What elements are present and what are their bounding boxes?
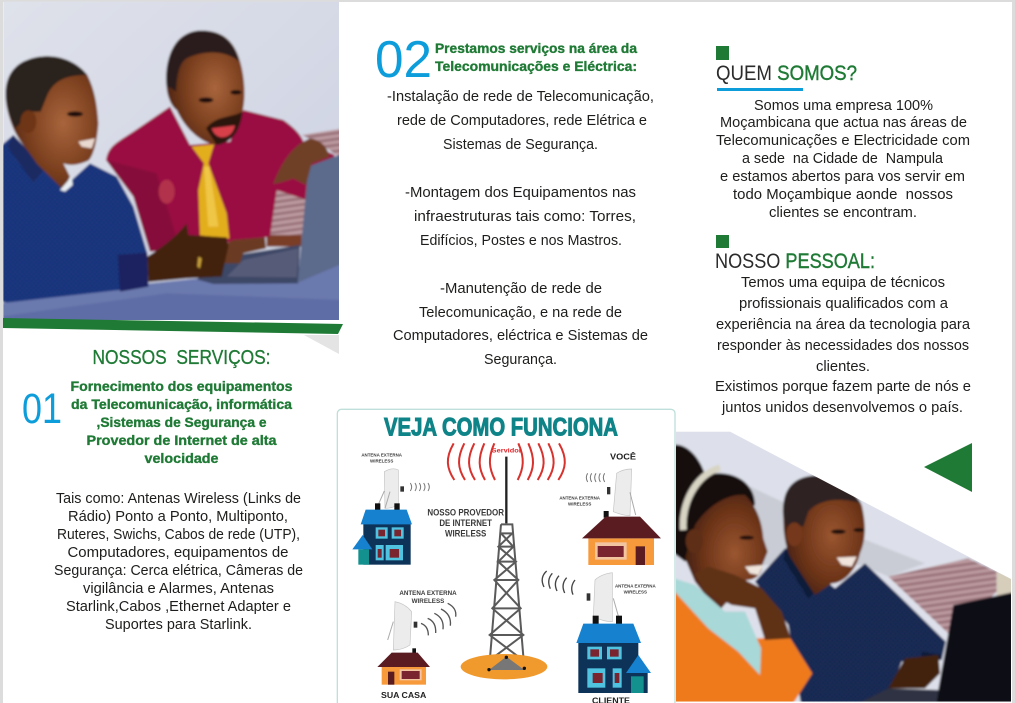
house bottom left bbox=[377, 590, 457, 700]
house top left: WIRELESS bbox=[370, 458, 393, 463]
green arrow bbox=[924, 443, 972, 492]
nosso pessoal text: Temos uma equipa de técnicos bbox=[741, 275, 945, 291]
blue underline bbox=[717, 88, 803, 91]
provider label: WIRELESS bbox=[445, 529, 486, 539]
house top left: ANTENA EXTERNA bbox=[361, 453, 403, 458]
orange top bbox=[672, 584, 812, 703]
house bottom left: ANTENA EXTERNA bbox=[399, 590, 457, 597]
house top right: WIRELESS bbox=[568, 501, 591, 506]
service 01 text: Tais como: Antenas Wireless (Links de bbox=[56, 491, 301, 507]
service 02 title: Telecomunicações e Eléctrica: bbox=[435, 59, 637, 74]
service 02 text: infraestruturas tais como: Torres, bbox=[414, 208, 636, 225]
service 01 text bbox=[54, 491, 303, 633]
laptop bbox=[197, 245, 300, 284]
number 02: 02 bbox=[375, 31, 432, 89]
house top right: VOCÊ bbox=[610, 451, 636, 462]
service 01 title: da Telecomunicação, informática bbox=[71, 397, 292, 412]
woman head bbox=[685, 495, 768, 612]
woman hand and arm bbox=[694, 567, 791, 640]
quem somos text: e estamos abertos para vos servir em bbox=[720, 169, 965, 185]
nosso pessoal text: juntos unidos desenvolvemos o país. bbox=[721, 400, 963, 416]
grey corner triangle bbox=[304, 335, 339, 354]
service 01 title: velocidade bbox=[144, 451, 219, 466]
heading: nossos serviços: NOSSOS SERVIÇOS: bbox=[92, 347, 270, 369]
green square marker bbox=[716, 46, 729, 60]
service 01 text: Starlink,Cabos ,Ethernet Adapter e bbox=[66, 599, 291, 615]
heading: nosso pessoal: NOSSO PESSOAL: bbox=[715, 250, 875, 273]
quem somos text: clientes se encontram. bbox=[769, 205, 917, 221]
woman hair bbox=[672, 445, 755, 562]
tower bbox=[488, 457, 525, 670]
quem somos text: a sede na Cidade de Nampula bbox=[742, 151, 944, 167]
heading: quem somos: QUEM SOMOS? bbox=[716, 62, 857, 85]
woman collar bbox=[672, 578, 761, 675]
house top left bbox=[352, 453, 429, 565]
provider label: NOSSO PROVEDOR bbox=[427, 508, 504, 518]
service 02 text: Edifícios, Postes e nos Mastros. bbox=[420, 232, 622, 249]
provider label bbox=[427, 508, 504, 539]
quem somos text: todo Moçambique aonde nossos bbox=[733, 187, 953, 203]
provider label: DE INTERNET bbox=[439, 518, 492, 528]
service 02 text: Telecomunicação, e na rede de bbox=[419, 304, 622, 321]
diagram title: VEJA COMO FUNCIONA bbox=[384, 414, 618, 442]
red shirt bbox=[106, 107, 335, 252]
headband bbox=[683, 468, 720, 530]
number 01: 01 bbox=[22, 385, 62, 433]
man head bbox=[782, 495, 866, 596]
service 02 text: rede de Computadores, rede Elétrica e bbox=[397, 112, 647, 129]
service 02 text: -Manutenção de rede de bbox=[440, 280, 602, 297]
photo: two men at a laptop bbox=[0, 0, 343, 327]
right man head bbox=[167, 31, 244, 145]
laptop bbox=[935, 591, 1015, 703]
yellow tie bbox=[192, 144, 229, 239]
service 02 text: Sistemas de Segurança. bbox=[443, 136, 598, 153]
pointing hand bbox=[273, 138, 329, 185]
green square marker bbox=[716, 235, 729, 248]
nosso pessoal text: clientes. bbox=[816, 359, 870, 375]
house bottom left: WIRELESS bbox=[412, 598, 445, 605]
tower base bbox=[461, 654, 547, 679]
service 01 title: Provedor de Internet de alta bbox=[86, 433, 277, 448]
service 01 text: Suportes para Starlink. bbox=[105, 617, 252, 633]
service 01 text: Ruteres, Swichs, Cabos de rede (UTP), bbox=[57, 527, 300, 543]
nosso pessoal text: responder às necessidades dos nossos bbox=[717, 338, 969, 354]
signal waves bbox=[448, 443, 565, 480]
service 02 title bbox=[435, 41, 637, 74]
service 01 title bbox=[70, 379, 292, 466]
nosso pessoal text: profissionais qualificados com a bbox=[739, 296, 949, 312]
server label: Servidor bbox=[492, 448, 522, 455]
house bottom right: WIRELESS bbox=[624, 589, 647, 594]
service 01 text: vigilância e Alarmes, Antenas bbox=[83, 581, 274, 597]
service 02 text bbox=[387, 88, 654, 368]
house top right: ANTENA EXTERNA bbox=[559, 496, 601, 501]
man shirt bbox=[755, 548, 946, 703]
house bottom right: ANTENA EXTERNA bbox=[615, 583, 656, 588]
blue shirt bbox=[0, 135, 148, 303]
nosso pessoal text bbox=[715, 275, 971, 416]
quem somos text: Somos uma empresa 100% bbox=[754, 98, 933, 114]
left man head bbox=[6, 56, 98, 190]
house top right bbox=[559, 451, 661, 565]
service 01 text: Segurança: Cerca elétrica, Câmeras de bbox=[54, 563, 303, 579]
service 01 text: Computadores, equipamentos de bbox=[68, 545, 288, 561]
quem somos text bbox=[716, 98, 970, 221]
hand on keyboard bbox=[888, 655, 940, 688]
nosso pessoal text: experiência na área da tecnologia para bbox=[716, 317, 971, 333]
quem somos text: Telecomunicações e Electricidade com bbox=[716, 133, 970, 149]
folded hand bbox=[147, 223, 228, 282]
service 02 text: Segurança. bbox=[484, 351, 557, 368]
house bottom right bbox=[542, 571, 656, 703]
house bottom left: SUA CASA bbox=[381, 690, 427, 700]
nosso pessoal text: Existimos porque fazem parte de nós e bbox=[715, 379, 971, 395]
service 02 title: Prestamos serviços na área da bbox=[435, 41, 637, 56]
service 01 title: ,Sistemas de Segurança e bbox=[96, 415, 267, 430]
quem somos text: Moçambicana que actua nas áreas de bbox=[720, 115, 967, 131]
service 01 title: Fornecimento dos equipamentos bbox=[70, 379, 292, 394]
diagram: veja como funciona bbox=[337, 409, 675, 703]
service 02 text: -Instalação de rede de Telecomunicação, bbox=[387, 88, 654, 105]
photo: woman and man at a laptop bbox=[672, 425, 1015, 703]
service 02 text: Computadores, eléctrica e Sistemas de bbox=[393, 327, 648, 344]
service 02 text: -Montagem dos Equipamentos nas bbox=[405, 184, 636, 201]
green band under photo bbox=[3, 318, 343, 334]
service 01 text: Rádio) Ponto a Ponto, Multiponto, bbox=[68, 509, 288, 525]
